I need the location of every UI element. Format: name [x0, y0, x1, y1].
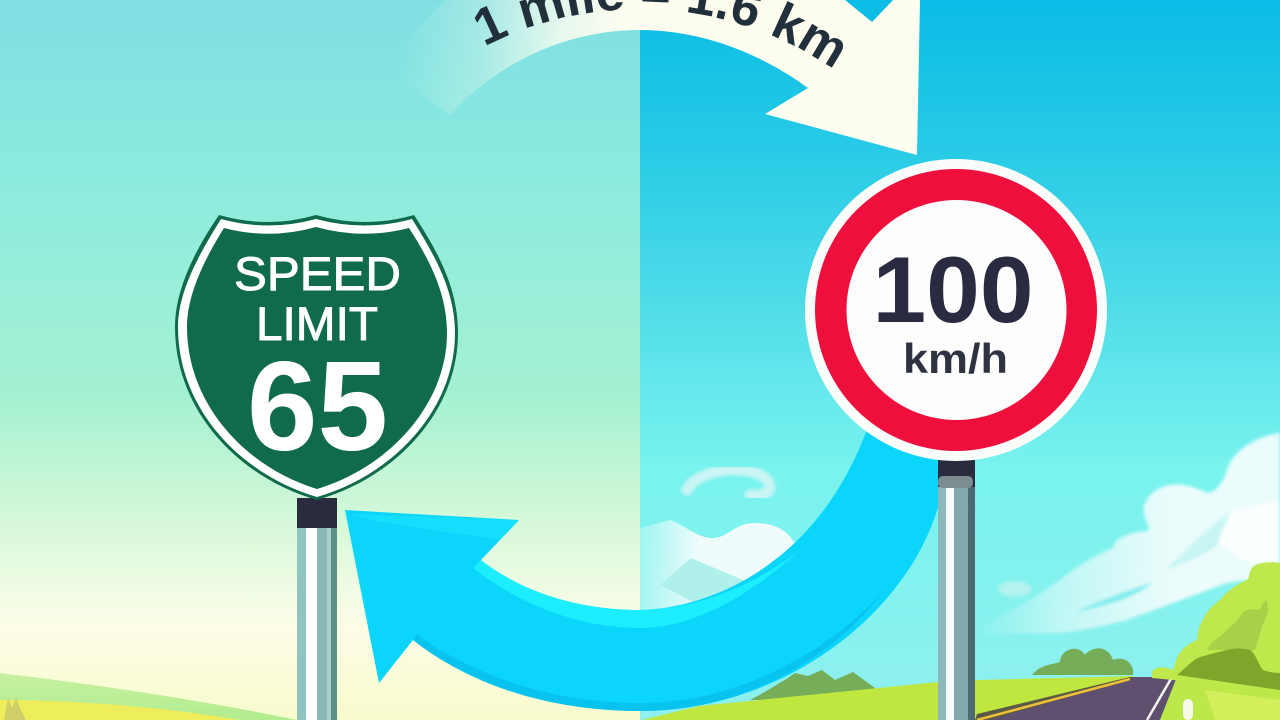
- panel: right sky background: [640, 0, 1280, 720]
- centre clouds: [640, 470, 800, 612]
- left meadow landscape: [0, 673, 297, 720]
- panel: left sky background: [0, 0, 640, 720]
- sign text: SPEED: SPEED: [234, 248, 401, 301]
- arrow: blue curved arrow from kilometres to miles: [345, 415, 945, 711]
- sign text: 100: 100: [872, 237, 1034, 342]
- right clouds: [977, 433, 1280, 634]
- background bushes: [1032, 648, 1133, 675]
- sign text: LIMIT: LIMIT: [256, 298, 378, 351]
- arrow: cream curved arrow from miles to kilometres: [380, 0, 920, 155]
- sign text: km/h: km/h: [903, 335, 1008, 382]
- post: left sign post: [297, 498, 337, 720]
- sign: US green speed limit shield: [175, 215, 458, 500]
- roadside verge: [1160, 677, 1280, 720]
- road: [985, 677, 1177, 720]
- sign text: 65: 65: [247, 335, 388, 477]
- right ground and road: [642, 562, 1280, 720]
- foreground bushes: [1152, 562, 1280, 690]
- post: right sign post: [938, 460, 975, 720]
- sign: red circular 100 km/h speed limit: [805, 159, 1107, 461]
